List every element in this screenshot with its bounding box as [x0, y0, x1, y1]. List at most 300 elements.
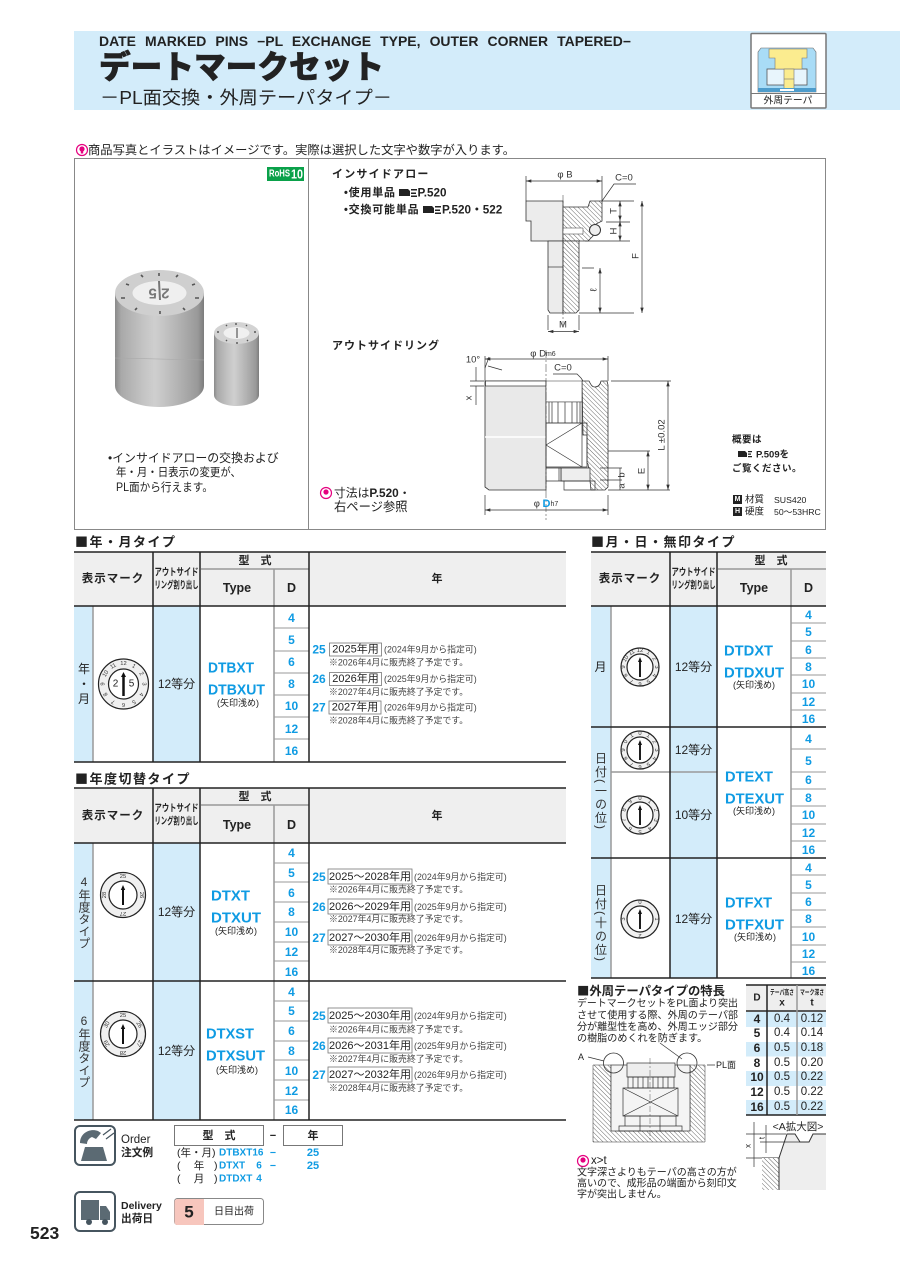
heading: month day blank type: ■月・日・無印タイプ [591, 532, 736, 550]
dial: year and month: 8 [103, 691, 110, 697]
dial: day ones 12 divisions: 7 [629, 760, 635, 767]
type codes: 6 year: (矢印浅め) [216, 1064, 258, 1075]
drawing: outside ring: E [636, 468, 648, 474]
D sizes: 4 [805, 732, 812, 746]
icon: telephone [75, 1126, 115, 1165]
heading: year month type: ■年・月タイプ [75, 532, 177, 550]
dial: day ones 10 divisions: 0 [638, 796, 642, 802]
D sizes: 12 [285, 1084, 298, 1098]
type codes: (矢印浅め) [217, 697, 259, 708]
table: taper height and mark depth: 0.4 [774, 1013, 791, 1025]
spec: material and hardness: 50〜53HRC [774, 507, 821, 517]
D sizes: 16 [802, 964, 815, 978]
order format boxes: 型 式 [202, 1128, 236, 1142]
delivery box [174, 1198, 264, 1225]
dial: month: 6 [638, 680, 642, 686]
D sizes: 8 [805, 791, 812, 805]
spec: material and hardness [733, 494, 821, 518]
order examples: 25 [307, 1147, 319, 1159]
dial: 6 year [100, 1012, 146, 1056]
dial: year and month: 9 [100, 682, 106, 686]
year rows: 4 year: 26 [312, 900, 326, 914]
dial: day tens: 0 [638, 900, 642, 906]
dial: month: 3 [653, 665, 659, 669]
table: taper height and mark depth: 0.5 [774, 1042, 790, 1054]
dial: month: 2 [650, 656, 657, 662]
dial: 4 year: 26 [138, 892, 144, 898]
order examples: 4 [256, 1174, 262, 1184]
order format boxes [174, 1126, 342, 1146]
year rows [312, 642, 477, 726]
year rows: 27 [312, 700, 326, 714]
year rows: 4 year: ※2028年4月に販売終了予定です。 [329, 944, 468, 955]
dial: day ones 10 divisions: 2 [652, 808, 659, 813]
dial: day ones 12 divisions: 4 [650, 755, 657, 762]
dial: 4 year [100, 872, 146, 918]
D sizes: 16 [802, 843, 815, 857]
table: taper height and mark depth [746, 985, 826, 1115]
order examples: DTBXT16 [219, 1148, 264, 1158]
year rows: 4 year [312, 869, 507, 955]
icon: hint bulb [76, 144, 88, 156]
D sizes: 8 [288, 677, 295, 691]
drawing: outside ring: a [616, 483, 628, 489]
table: year switching type: アウトサイド [154, 802, 198, 814]
drawing: inside arrow: C=0 [615, 172, 633, 184]
note: x greater than t: 高いので、成形品の端面から刻印文 [577, 1176, 737, 1190]
year rows: 6 year: 2027〜2032年用 [329, 1067, 411, 1081]
year rows: 6 year: (2026年9月から指定可) [414, 1069, 507, 1080]
year rows: 4 year: ※2027年4月に販売終了予定です。 [329, 913, 468, 924]
table: year switching type: 型 式 [238, 789, 272, 803]
dial: month [621, 648, 659, 686]
dial: year and month: 2 [113, 678, 119, 690]
order examples: ( [177, 1173, 181, 1185]
dial: month: 10 [622, 655, 630, 663]
table: taper height and mark depth: t [810, 998, 814, 1008]
heading: year switching type: ■年度切替タイプ [75, 768, 191, 788]
drawing: inside arrow: ℓ [588, 288, 600, 292]
table: taper height and mark depth: 8 [754, 1056, 761, 1070]
text: inside arrow references: P.520 [418, 186, 447, 200]
table: taper height and mark depth: 0.12 [801, 1013, 823, 1025]
year rows: 4 year: (2026年9月から指定可) [414, 932, 507, 943]
table: taper height and mark depth: 0.22 [801, 1101, 823, 1113]
english subtitle: DATE MARKED PINS −PL EXCHANGE TYPE, OUTER CORNER TAPERED− [99, 34, 631, 49]
dial: month: 5 [645, 677, 651, 684]
D sizes: 4 [805, 608, 812, 622]
dial: day ones 10 divisions: 8 [621, 808, 628, 813]
year rows: 6 year: ※2027年4月に販売終了予定です。 [329, 1053, 468, 1064]
order examples: DTXT [219, 1160, 245, 1172]
vertical labels: 月 [594, 660, 607, 674]
year rows: (2024年9月から指定可) [384, 644, 477, 654]
year rows: 4 year: ※2026年4月に販売終了予定です。 [329, 884, 468, 894]
dial: month: 9 [621, 665, 627, 669]
dial: day ones 12 divisions: 1 [629, 733, 635, 740]
note: dimensions reference [320, 486, 411, 514]
order examples: − [270, 1147, 276, 1159]
dial: year and month: 5 [131, 698, 136, 705]
description: させて使用する際、外周のテーパ部 [577, 1008, 738, 1022]
type codes: DTEXT [725, 768, 773, 786]
year rows: 6 year: (2025年9月から指定可) [414, 1040, 507, 1051]
type codes: 6 year: DTXSUT [206, 1048, 265, 1064]
dial: month: 1 [645, 650, 651, 657]
dial: day ones 12 divisions: 8 [623, 755, 630, 761]
table: taper height and mark depth: 0.5 [774, 1101, 790, 1113]
note: overview reference: 概要は [732, 434, 762, 446]
description [577, 996, 738, 1044]
table: month day blank type: D [804, 581, 813, 595]
drawing: outside ring: φ Dm6 [530, 348, 556, 360]
type codes [724, 642, 784, 942]
drawing: inside arrow: H [608, 227, 620, 234]
table: year month type: Type [223, 581, 251, 595]
diagram: A detail: t [758, 1136, 766, 1139]
year rows: 6 year: 26 [312, 1039, 326, 1053]
type codes: DTEXUT [725, 790, 784, 808]
drawing: inside arrow: φ B [557, 170, 573, 180]
order examples: ( [177, 1160, 181, 1172]
table: year switching type: リング割り出し [154, 814, 198, 828]
year rows: 2025年用 [332, 642, 379, 656]
D sizes: 8 [805, 660, 812, 674]
note: x greater than t: 字が突出しません。 [577, 1188, 667, 1200]
D sizes: 10 [802, 808, 815, 822]
table: taper height and mark depth: 0.22 [801, 1086, 823, 1098]
label: outside ring: アウトサイドリング [332, 338, 440, 352]
year rows: 6 year: 25 [312, 1009, 326, 1023]
dial: 6 year: 28 [120, 1049, 126, 1055]
badge: RoHS10: RoHS [269, 168, 290, 180]
vertical label: ・ [78, 677, 90, 691]
order examples [177, 1146, 319, 1185]
D sizes [285, 846, 298, 1117]
dial: day ones 10 divisions: 1 [646, 799, 652, 805]
note: dimensions reference: 寸法はP.520・ [334, 486, 411, 500]
subtitle: －PL面交換・外周テーパタイプ－ [100, 88, 392, 108]
D sizes: 10 [285, 699, 298, 713]
type codes: (矢印浅め) [733, 679, 775, 690]
type codes: 6 year: DTXST [206, 1026, 254, 1042]
D sizes: 8 [288, 905, 295, 919]
D sizes [802, 608, 815, 978]
D sizes: 4 [805, 861, 812, 875]
dial: month: 4 [650, 672, 657, 679]
drawing: outside ring: C=0 [554, 362, 572, 374]
section: delivery: Delivery [121, 1200, 162, 1212]
year rows: 6 year: 2025〜2030年用 [329, 1008, 411, 1022]
D sizes: 12 [802, 695, 815, 709]
D sizes: 6 [805, 773, 812, 787]
table: year month type: 12等分 [158, 677, 195, 691]
table: taper height and mark depth: 0.14 [801, 1027, 824, 1039]
table: year month type: 型 式 [238, 553, 272, 567]
dial: 6 year: 27 [134, 1039, 143, 1047]
dial: day tens: 3 [621, 917, 627, 921]
type codes: 4 year: (矢印浅め) [215, 925, 257, 936]
D sizes: 16 [285, 1103, 298, 1117]
text: inside arrow references: •使用単品 [344, 185, 396, 199]
table: taper height and mark depth: 0.20 [801, 1057, 823, 1069]
year rows: 6 year [312, 1008, 507, 1093]
dial: day tens: 2 [638, 932, 642, 938]
D sizes: 16 [285, 744, 298, 758]
note: dimensions reference: 右ページ参照 [334, 499, 408, 514]
D sizes: 12 [802, 947, 815, 961]
vertical label [78, 662, 90, 706]
order examples: ) [214, 1160, 218, 1172]
type codes: DTFXT [725, 894, 772, 912]
note: overview reference: P.509を [756, 450, 789, 460]
type codes: DTBXT [208, 660, 254, 676]
table: taper height and mark depth: 0.5 [774, 1071, 790, 1083]
text: inside arrow references [332, 168, 503, 216]
table: taper height and mark depth: 0.5 [774, 1086, 790, 1098]
drawing: outside ring: x [464, 395, 474, 400]
photo: date mark pins [115, 270, 259, 407]
table: year month type: 年 [432, 571, 442, 585]
dial: year and month: 3 [140, 682, 146, 686]
year rows: ※2027年4月に販売終了予定です。 [329, 686, 468, 697]
year rows: 6 year: 27 [312, 1068, 326, 1082]
order format boxes: 年 [308, 1128, 318, 1142]
table: taper height and mark depth: D [753, 992, 761, 1004]
type codes: (矢印浅め) [733, 805, 775, 816]
table: taper height and mark depth: マーク深さ [800, 988, 824, 996]
dial: year and month: 11 [109, 663, 118, 671]
title: デートマークセット [99, 49, 384, 85]
year rows: 25 [312, 642, 326, 656]
dial: year and month: 10 [102, 670, 110, 678]
D sizes: 5 [805, 754, 812, 768]
dial: 6 year: 26 [134, 1021, 143, 1029]
diagram: A detail: <A拡大図> [773, 1120, 823, 1133]
dial: year and month: 12 [120, 661, 127, 667]
dial: year and month: 7 [111, 698, 116, 705]
section: order example: Order [121, 1134, 151, 1146]
note: x greater than t: 文字深さよりもテーパの高さの方が [577, 1166, 737, 1178]
dial: 6 year: 25 [120, 1013, 126, 1019]
dial: day ones 12 divisions: 0 [623, 739, 630, 745]
vertical labels [594, 660, 608, 962]
D sizes: 4 [288, 611, 295, 625]
text: feature note: PL面から行えます。 [116, 481, 213, 494]
panel: product photo and drawings [74, 158, 826, 530]
type codes: 6 year [206, 1026, 265, 1075]
D sizes: 10 [802, 677, 815, 691]
vertical label: 6 year: 6年度タイプ [77, 1014, 91, 1088]
dial: 4 year: 28 [102, 892, 108, 898]
spec: material and hardness: 材質 [745, 494, 764, 506]
table: year month type: アウトサイド [154, 566, 198, 578]
drawing: outside ring: L ±0.02 [656, 419, 668, 451]
diagram: A detail: x [744, 1144, 752, 1148]
dial: month: 7 [629, 677, 635, 684]
year rows: 6 year: 2026〜2031年用 [329, 1038, 411, 1052]
dial: day ones 12 divisions: 6 [638, 763, 642, 769]
table: taper height and mark depth: 5 [754, 1026, 761, 1040]
D sizes: 4 [288, 985, 295, 999]
division labels: 10等分 [675, 808, 712, 822]
vertical labels: 日付(一の位) [594, 752, 608, 830]
section: order example [75, 1126, 342, 1185]
table: month day blank type [591, 552, 826, 978]
year rows: 4 year: (2024年9月から指定可) [414, 871, 507, 882]
drawing: inside arrow: T [608, 208, 620, 214]
drawing: outside ring: φ Dh7 [534, 498, 558, 510]
dial: year and month: 2 [137, 671, 144, 677]
type codes: (矢印浅め) [734, 931, 776, 942]
icon: outer taper cross-section: 外周テーパ [764, 94, 813, 106]
table: year month type: 表示マーク [82, 571, 144, 585]
order examples: 年 [194, 1159, 204, 1172]
note: x greater than t: x>t [591, 1155, 607, 1167]
section: delivery [75, 1192, 264, 1231]
D sizes: 6 [288, 655, 295, 669]
text: feature note: 年・月・日表示の変更が、 [116, 465, 241, 479]
table: taper height and mark depth: 6 [754, 1041, 761, 1055]
icon: outer taper cross-section [751, 34, 826, 108]
D sizes: 5 [288, 866, 295, 880]
table: year switching type: 表示マーク [82, 808, 144, 822]
dial: day ones 12 divisions [621, 731, 659, 769]
note: x greater than t [577, 1155, 737, 1200]
dial: 4 year: 27 [120, 910, 126, 916]
dial: day ones 10 divisions: 5 [638, 828, 642, 834]
table: taper height and mark depth: 16 [750, 1100, 764, 1114]
delivery box: 5 [184, 1202, 194, 1222]
D sizes: 12 [802, 826, 815, 840]
vertical label: 月 [78, 692, 90, 706]
year rows: 4 year: 2025〜2028年用 [329, 869, 411, 883]
dial: month: 12 [637, 648, 643, 654]
D sizes: 10 [802, 930, 815, 944]
header band [74, 31, 900, 110]
type codes: DTFXUT [725, 916, 784, 934]
dial: day ones 10 divisions: 4 [646, 825, 652, 832]
dial: day ones 12 divisions: 0 [638, 731, 642, 737]
table: taper height and mark depth: 0.5 [774, 1057, 790, 1069]
table: month day blank type: リング割り出し [672, 578, 716, 592]
dial: year and month: 1 [131, 663, 136, 670]
drawing: inside arrow: M [559, 320, 567, 330]
table: year month type: D [287, 581, 296, 595]
order examples: ) [214, 1173, 218, 1185]
order examples: DTDXT [219, 1174, 252, 1184]
delivery box: 日目出荷 [214, 1206, 254, 1218]
badge: RoHS10: 10 [291, 166, 303, 182]
drawing: inside arrow [526, 170, 642, 332]
dial: day ones 10 divisions [621, 796, 659, 834]
dial: day tens [621, 900, 659, 938]
dial: day ones 12 divisions: 2 [650, 739, 657, 745]
year rows: 4 year: 2026〜2029年用 [329, 899, 411, 913]
D sizes: 4 [288, 846, 295, 860]
text: feature note: •インサイドアローの交換および [108, 451, 279, 465]
dial: day ones 12 divisions: 1 [645, 733, 651, 740]
table: month day blank type: アウトサイド [672, 566, 716, 578]
diagram: mounted in mold: A [578, 1052, 584, 1062]
table: taper height and mark depth: 4 [754, 1012, 761, 1026]
diagram: mounted in mold [578, 1043, 736, 1142]
heading: ■外周テーパタイプの特長 [577, 982, 725, 999]
division labels: 12等分 [675, 912, 712, 926]
order format boxes: − [270, 1130, 276, 1142]
year rows: 26 [312, 672, 326, 686]
page number: 523 [30, 1223, 59, 1243]
table: taper height and mark depth: 12 [750, 1085, 764, 1099]
dial: year and month: 4 [137, 691, 144, 698]
type codes: 4 year: DTXT [211, 888, 250, 904]
D sizes: 10 [285, 1064, 298, 1078]
dial: day ones 12 divisions: 5 [645, 760, 651, 767]
table: taper height and mark depth: テーパ高さ [770, 988, 794, 996]
year rows: 4 year: 25 [312, 870, 326, 884]
drawing: inside arrow: F [630, 253, 642, 259]
order examples: 25 [307, 1160, 319, 1172]
order examples: − [270, 1160, 276, 1172]
dial: 4 year: 25 [120, 874, 126, 880]
vertical labels: 日付(十の位) [594, 884, 608, 962]
table: taper height and mark depth: 0.22 [801, 1071, 823, 1083]
division labels: 12等分 [675, 660, 712, 674]
note: overview reference [732, 434, 802, 474]
note: overview reference: ご覧ください。 [732, 462, 802, 474]
description: の樹脂のめくれを防ぎます。 [577, 1032, 707, 1044]
dial: day ones 12 divisions: 9 [621, 748, 627, 752]
dial: 6 year: 29 [103, 1039, 112, 1047]
text: feature note [108, 451, 279, 494]
year rows: 4 year: 27 [312, 931, 326, 945]
section: order example: 注文例 [121, 1146, 153, 1159]
text: inside arrow references: P.520・522 [442, 204, 503, 216]
D sizes: 12 [285, 945, 298, 959]
year rows: ※2026年4月に販売終了予定です。 [329, 656, 468, 668]
vertical label: 4 year: 4年度タイプ [77, 875, 91, 949]
table: year switching type: Type [223, 818, 251, 832]
dial: day ones 12 divisions: 3 [653, 748, 659, 752]
D sizes: 5 [288, 633, 295, 647]
table: year month type: リング割り出し [154, 578, 198, 592]
year rows: 4 year: (2025年9月から指定可) [414, 901, 507, 912]
spec: material and hardness: M [735, 496, 741, 503]
year rows: 2027年用 [332, 700, 378, 714]
division labels [675, 660, 712, 926]
table: year switching type: 12等分 [158, 1044, 195, 1058]
D sizes: 8 [805, 912, 812, 926]
table: taper height and mark depth: 0.4 [774, 1027, 791, 1039]
D sizes: 6 [288, 886, 295, 900]
dial: month: 8 [623, 672, 630, 678]
drawing: outside ring [464, 348, 671, 520]
dial: year and month [98, 659, 148, 709]
text: inside arrow references: インサイドアロー [332, 168, 430, 180]
D sizes: 6 [805, 643, 812, 657]
D sizes: 16 [285, 965, 298, 979]
dial: month: 11 [628, 649, 636, 657]
vertical label: 年 [78, 662, 90, 676]
table: month day blank type: 表示マーク [599, 571, 661, 585]
year rows: 4 year: 2027〜2030年用 [329, 930, 411, 944]
D sizes: 8 [288, 1044, 295, 1058]
spec: material and hardness: 硬度 [745, 506, 764, 518]
badge: RoHS10 [267, 166, 304, 182]
D sizes: 12 [285, 722, 298, 736]
table: taper height and mark depth: 0.18 [801, 1042, 823, 1054]
dial: day ones 10 divisions: 6 [628, 825, 634, 831]
